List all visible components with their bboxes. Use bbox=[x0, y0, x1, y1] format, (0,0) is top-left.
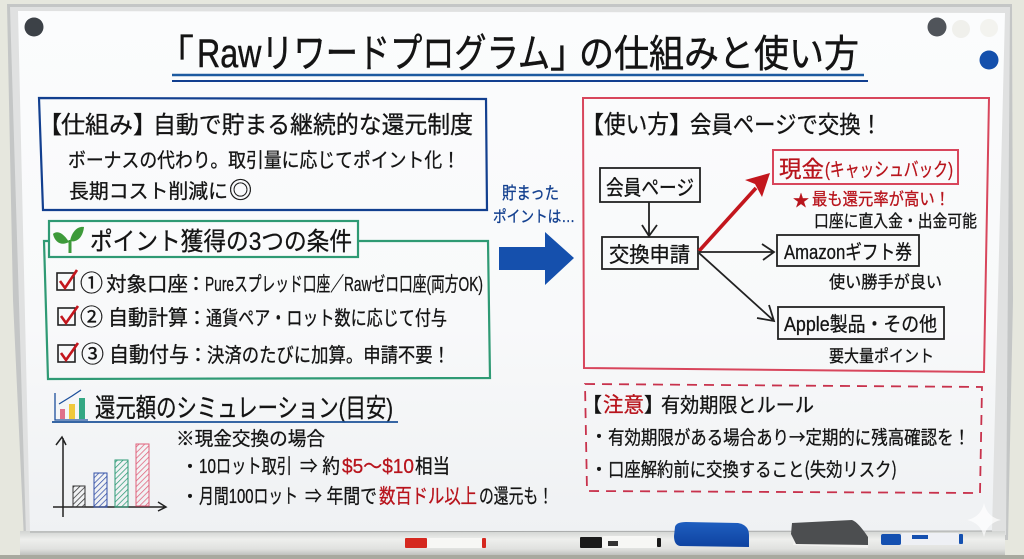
callout: saved points arrow bbox=[493, 184, 575, 285]
condition 3: 自動付与 bbox=[109, 344, 189, 367]
heading: caution: 注意 bbox=[603, 394, 644, 417]
heading: how to use: 使い方 bbox=[604, 111, 669, 139]
condition 2: ： bbox=[187, 308, 207, 330]
heading: how to use: 【 bbox=[580, 112, 604, 139]
text: caution line 2: 口座解約前に交換すること(失効リスク) bbox=[608, 455, 897, 482]
condition 3 bbox=[58, 335, 450, 369]
text: 100 lots: ・ bbox=[181, 487, 199, 507]
heading: mechanism: 仕組み bbox=[61, 112, 133, 139]
heading: simulation: 還元額のシミュレーション(目安) bbox=[95, 393, 393, 423]
option: cash: 現金 bbox=[779, 156, 824, 182]
condition 1: ① bbox=[80, 264, 103, 298]
heading: how to use: 会員ページで交換！ bbox=[690, 112, 882, 139]
callout: saved points arrow: ポイントは… bbox=[493, 208, 575, 226]
text: easy to use: 使い勝手が良い bbox=[829, 272, 942, 292]
flow: exchange application: 交換申請 bbox=[609, 244, 690, 267]
arrow: member page to application bbox=[642, 202, 657, 236]
text: 10 lots: ・ bbox=[181, 457, 199, 477]
heading: mechanism: 自動で貯まる継続的な還元制度 bbox=[153, 112, 473, 139]
option: cash bbox=[773, 150, 958, 184]
heading: mechanism: 【 bbox=[38, 112, 62, 139]
condition 1: ： bbox=[186, 274, 206, 296]
tray items bbox=[405, 520, 963, 548]
heading box: conditions bbox=[49, 221, 358, 257]
text: 10 lots: $5～$10 bbox=[342, 456, 414, 478]
text: 10 lots bbox=[181, 455, 450, 478]
text: caution line 1: ・ bbox=[590, 427, 608, 447]
condition 1 bbox=[57, 264, 483, 298]
title bbox=[156, 32, 868, 81]
text: 10 lots: ⇒ 約 bbox=[300, 455, 340, 478]
option: amazon: Amazonギフト券 bbox=[784, 241, 912, 264]
heading: mechanism: 】 bbox=[133, 112, 157, 139]
text: 100 lots bbox=[181, 485, 553, 508]
panel: how to use bbox=[580, 98, 989, 372]
condition 2: 通貨ペア・ロット数に応じて付与 bbox=[206, 307, 447, 330]
text: cash exchange note: ※現金交換の場合 bbox=[176, 428, 325, 450]
flow: member page: 会員ページ bbox=[606, 177, 694, 200]
dark eraser bbox=[791, 520, 868, 548]
text: 10 lots: 相当 bbox=[415, 455, 450, 478]
icon: sparkle watermark bbox=[967, 503, 1001, 537]
text: 100 lots: ⇒ 年間で bbox=[305, 485, 377, 508]
heading: caution: 有効期限とルール bbox=[661, 394, 814, 417]
flow: member page bbox=[600, 168, 700, 202]
text: many points: 要大量ポイント bbox=[829, 347, 934, 366]
text: 10 lots: 10ロット取引 bbox=[199, 455, 292, 478]
text: 100 lots: 数百ドル以上 bbox=[379, 485, 477, 508]
heading: caution: 】 bbox=[644, 395, 664, 417]
option: apple: Apple製品・その他 bbox=[784, 313, 937, 336]
text: highest return: ★ bbox=[793, 187, 809, 211]
text: mechanism line 1: ボーナスの代わり。取引量に応じてポイント化！ bbox=[68, 149, 460, 172]
title: Rawリワードプログラム bbox=[197, 32, 550, 76]
text: deposit: 口座に直入金・出金可能 bbox=[814, 212, 977, 231]
condition 2: 自動計算 bbox=[108, 307, 188, 330]
heading: caution: 【 bbox=[582, 395, 602, 417]
arrow: to apple bbox=[699, 253, 774, 321]
icon: sprout bbox=[53, 227, 84, 253]
blue eraser bbox=[674, 522, 749, 547]
title: 」 bbox=[550, 34, 588, 76]
condition 2: ② bbox=[80, 298, 103, 332]
text: mechanism line 2: 長期コスト削減に bbox=[69, 180, 228, 203]
condition 1: Pureスプレッド口座／Rawゼロ口座(両方OK) bbox=[205, 273, 483, 296]
condition 1: 対象口座 bbox=[106, 273, 188, 296]
option: amazon bbox=[777, 235, 919, 266]
text: caution line 2: ・ bbox=[590, 460, 608, 480]
heading: how to use: 】 bbox=[669, 112, 693, 139]
callout: saved points arrow: 貯まった bbox=[502, 184, 559, 203]
text: highest return bbox=[793, 187, 950, 211]
arrow: red to cash bbox=[699, 173, 770, 251]
panel: three conditions bbox=[44, 221, 490, 379]
condition 2 bbox=[58, 298, 447, 332]
text: highest return: 最も還元率が高い！ bbox=[812, 190, 950, 209]
option: apple bbox=[778, 307, 944, 339]
text: mechanism line 2 bbox=[69, 171, 252, 205]
panel: mechanism bbox=[38, 98, 487, 210]
option: cash: (キャッシュバック) bbox=[825, 159, 953, 181]
black marker bbox=[580, 536, 661, 548]
blue marker bbox=[881, 533, 963, 545]
text: mechanism line 2: ◎ bbox=[229, 171, 252, 205]
text: caution line 1: 有効期限がある場合あり→定期的に残高確認を！ bbox=[608, 423, 970, 450]
icon: small bar chart bbox=[55, 390, 88, 420]
red marker bbox=[405, 538, 486, 548]
condition 3: ③ bbox=[81, 335, 104, 369]
chart: rising bars bbox=[53, 437, 166, 517]
title: 「 bbox=[156, 34, 194, 76]
title: の仕組みと使い方 bbox=[579, 34, 859, 76]
panel: caution bbox=[582, 384, 982, 493]
arrow: to amazon bbox=[699, 244, 774, 260]
magnets bbox=[24, 18, 998, 70]
text: 100 lots: の還元も！ bbox=[479, 485, 553, 508]
condition 3: 決済のたびに加算。申請不要！ bbox=[207, 344, 450, 367]
heading: how to use bbox=[580, 111, 882, 139]
flow: exchange application bbox=[602, 237, 698, 269]
condition 3: ： bbox=[188, 345, 208, 367]
heading: caution bbox=[582, 394, 814, 417]
text: 100 lots: 月間100ロット bbox=[199, 486, 298, 508]
heading box: conditions: ポイント獲得の3つの条件 bbox=[90, 228, 352, 256]
section: simulation bbox=[52, 390, 553, 517]
